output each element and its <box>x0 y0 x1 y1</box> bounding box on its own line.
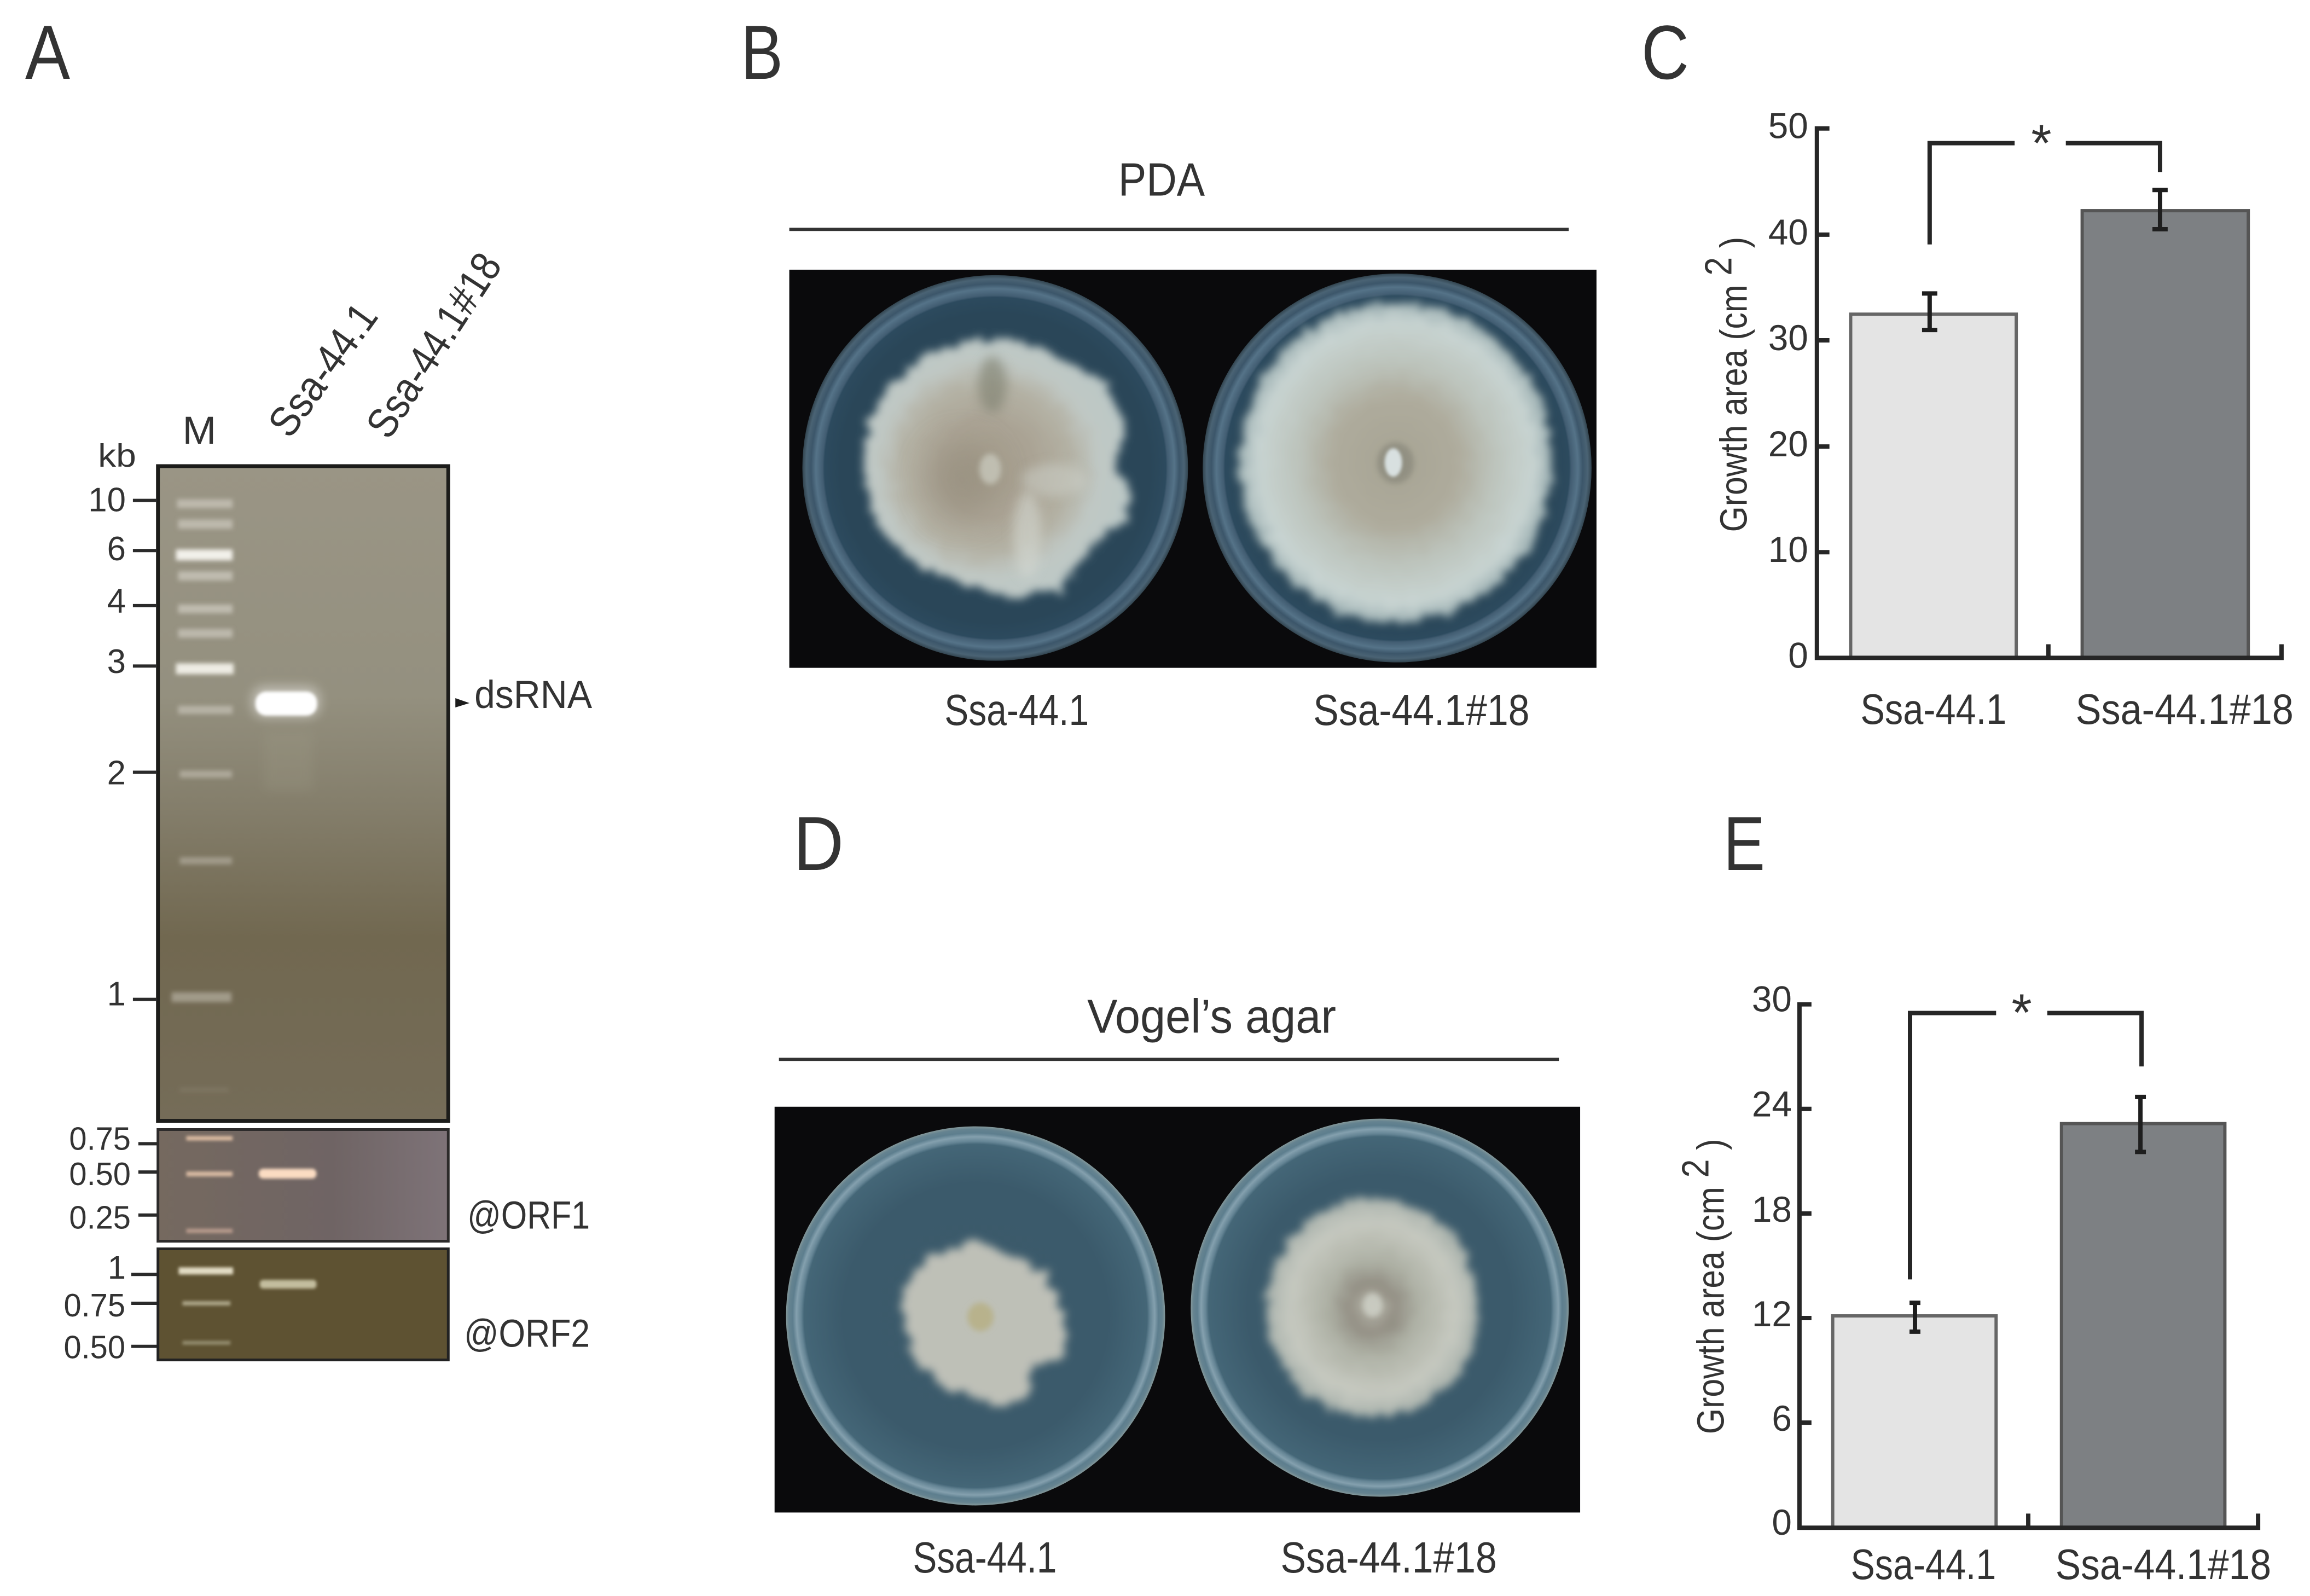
y tick labels: 0 <box>1788 635 1808 675</box>
y axis title: 2 <box>1674 1150 1717 1187</box>
y tick labels <box>1768 106 1808 675</box>
ladder bands <box>172 500 234 1092</box>
ORF2 blot image <box>158 1249 448 1360</box>
photo background <box>775 1107 1580 1512</box>
PDA heading: PDA <box>1118 154 1205 206</box>
panel A: gel electrophoresis <box>63 245 592 1366</box>
lane label Ssa-44.1: Ssa-44.1 <box>259 294 387 445</box>
y axis title: ) <box>1712 237 1755 248</box>
label Ssa-44.1: Ssa-44.1 <box>944 686 1089 734</box>
significance bracket <box>1910 1013 2141 1279</box>
y axis title: ) <box>1690 1139 1732 1150</box>
panel E: bar chart on Vogel's agar <box>1674 979 2271 1588</box>
lane label Ssa-44.1#18: Ssa-44.1#18 <box>357 245 511 446</box>
ORF1 blot image <box>158 1129 448 1241</box>
label Ssa-44.1#18: Ssa-44.1#18 <box>1281 1533 1497 1582</box>
x label Ssa-44.1: Ssa-44.1 <box>1850 1541 1996 1588</box>
significance star: * <box>2031 114 2052 172</box>
panel letter E: E <box>1723 800 1765 886</box>
ORF2 scale <box>63 1249 157 1366</box>
ORF1 scale: 0.50 <box>69 1156 131 1192</box>
panel D: Vogel's agar plates <box>775 989 1580 1582</box>
y tick labels: 12 <box>1752 1294 1792 1334</box>
y tick labels: 20 <box>1768 424 1808 464</box>
ORF1 label: @ORF1 <box>467 1194 590 1238</box>
kb scale numbers: 6 <box>107 530 126 568</box>
plate: Ssa-44.1#18 on PDA <box>1203 274 1592 663</box>
lane header M: M <box>182 409 216 452</box>
kb scale numbers: 3 <box>107 643 126 681</box>
plate: Ssa-44.1 on PDA <box>802 275 1188 661</box>
dsRNA label: dsRNA <box>474 673 592 717</box>
y tick labels: 30 <box>1752 979 1792 1019</box>
plate: Ssa-44.1#18 on Vogel's agar <box>1191 1119 1569 1497</box>
kb scale numbers <box>88 481 126 1013</box>
kb scale numbers: 10 <box>88 481 126 519</box>
bar Ssa-44.1 <box>1850 314 2016 658</box>
error bars <box>1922 190 2168 330</box>
dsRNA arrow <box>455 698 469 707</box>
ORF2 scale: 0.50 <box>63 1329 125 1366</box>
kb scale numbers: 4 <box>107 583 126 620</box>
y tick labels: 18 <box>1752 1189 1792 1229</box>
ORF1 scale: 0.25 <box>69 1199 131 1236</box>
y tick labels: 0 <box>1772 1502 1792 1542</box>
kb unit label: kb <box>98 437 136 474</box>
panel letter D: D <box>793 800 844 886</box>
significance star: * <box>2011 983 2032 1042</box>
axes and ticks <box>1817 129 2282 658</box>
y axis title: Growth area (cm <box>1690 1150 1732 1434</box>
ORF1 scale <box>69 1120 157 1236</box>
main dsRNA gel image <box>158 466 448 1121</box>
panel letter A: A <box>25 9 71 95</box>
dsRNA band <box>252 686 320 718</box>
y tick labels: 40 <box>1768 212 1808 252</box>
bar Ssa-44.1 <box>1833 1316 1996 1528</box>
ORF2 scale: 0.75 <box>63 1287 125 1324</box>
significance bracket <box>1930 143 2160 245</box>
ORF2 scale: 1 <box>108 1249 126 1286</box>
y tick labels <box>1752 979 1792 1542</box>
label Ssa-44.1: Ssa-44.1 <box>913 1533 1057 1582</box>
y tick labels: 10 <box>1768 530 1808 570</box>
Vogel's agar heading: Vogel’s agar <box>1087 989 1336 1043</box>
plate: Ssa-44.1 on Vogel's agar <box>786 1127 1165 1505</box>
PDA divider line <box>790 228 1569 231</box>
y tick labels: 24 <box>1752 1084 1792 1124</box>
photo background <box>790 270 1597 668</box>
Vogel divider line <box>779 1058 1559 1061</box>
bar Ssa-44.1#18 <box>2082 211 2248 658</box>
panel B: PDA plates <box>790 154 1597 734</box>
panel letter C: C <box>1641 9 1689 95</box>
y tick labels: 6 <box>1772 1398 1792 1438</box>
y tick labels: 30 <box>1768 318 1808 358</box>
panel C: bar chart on PDA <box>1697 106 2294 733</box>
bar Ssa-44.1#18 <box>2062 1124 2225 1528</box>
label Ssa-44.1#18: Ssa-44.1#18 <box>1313 686 1529 734</box>
kb scale numbers: 1 <box>107 976 126 1013</box>
kb scale numbers: 2 <box>107 754 126 792</box>
ORF1 scale: 0.75 <box>69 1120 131 1157</box>
x label Ssa-44.1#18: Ssa-44.1#18 <box>2056 1541 2271 1588</box>
axes and ticks <box>1800 1005 2258 1528</box>
x label Ssa-44.1: Ssa-44.1 <box>1860 686 2006 733</box>
y axis title: Growth area (cm <box>1712 248 1755 532</box>
y axis title: 2 <box>1697 248 1739 285</box>
x label Ssa-44.1#18: Ssa-44.1#18 <box>2076 686 2294 733</box>
error bars <box>1909 1097 2146 1332</box>
kb scale ticks <box>133 501 157 1000</box>
ORF2 label: @ORF2 <box>464 1312 590 1356</box>
panel letter B: B <box>741 9 783 95</box>
y tick labels: 50 <box>1768 106 1808 146</box>
